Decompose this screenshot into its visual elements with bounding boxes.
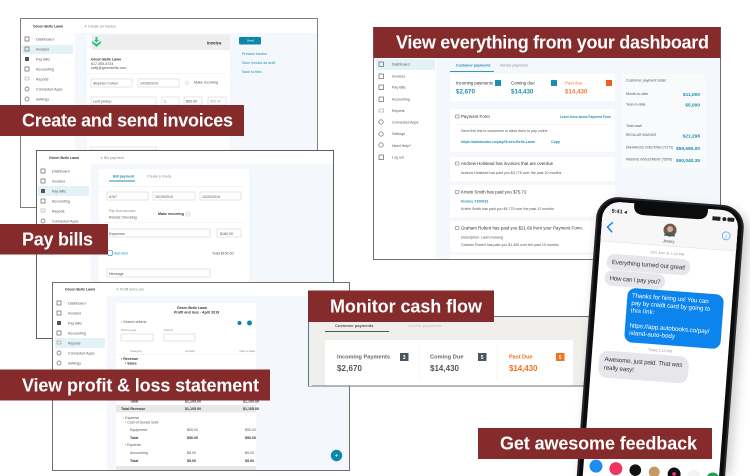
panel: dashboard screenshot: $90,040.35 bbox=[676, 158, 700, 164]
panel: monitor cash flow screenshot: Customer payments bbox=[335, 323, 374, 328]
panel: invoice screenshot: 10/26/2019 bbox=[140, 82, 158, 86]
panel: dashboard screenshot: Send this link to customers to allow them to pay online bbox=[461, 129, 548, 133]
banner: view profit and loss statement: View profit & loss statement bbox=[22, 376, 259, 396]
panel: profit and loss screenshot: $50.00 bbox=[245, 428, 256, 432]
panel: pay bills screenshot: Pay Bills bbox=[52, 190, 66, 194]
panel: pay bills screenshot: 10/19/2019 bbox=[155, 195, 173, 199]
panel: profit and loss screenshot: Accounting bbox=[68, 332, 86, 336]
panel: dashboard screenshot: Reports bbox=[392, 109, 405, 113]
panel: invoice screenshot: Make recurring bbox=[194, 80, 218, 84]
panel: dashboard screenshot: Customer payments bbox=[456, 64, 491, 68]
message bubble: payment link: Thanks for hiring us! You can bbox=[632, 292, 709, 305]
panel: invoice screenshot: Save invoice as draft bbox=[242, 61, 275, 65]
panel: dashboard screenshot: Invoices bbox=[392, 74, 405, 78]
panel: invoice screenshot bbox=[20, 18, 318, 208]
message bubble: payment link: https://app.autobooks.co/pay/ bbox=[629, 322, 710, 335]
message bubble: awesome just paid bbox=[598, 350, 689, 384]
panel: invoice screenshot: Settings bbox=[36, 98, 49, 102]
panel: invoice screenshot: 1 bbox=[164, 100, 166, 104]
panel: invoice screenshot: Leaf pickup bbox=[93, 100, 111, 104]
banner: pay bills: Pay bills bbox=[22, 230, 93, 250]
panel: dashboard screenshot: Copy bbox=[551, 140, 560, 144]
panel: profit and loss screenshot: Category bbox=[130, 349, 143, 353]
panel: profit and loss screenshot: $1,105.00 bbox=[243, 407, 259, 411]
panel: dashboard screenshot: Invoice #100031 bbox=[461, 200, 488, 204]
panel: dashboard screenshot: Past due bbox=[565, 80, 583, 86]
panel: profit and loss screenshot: $5.00 bbox=[245, 459, 254, 463]
icon: info: i bbox=[725, 234, 727, 240]
panel: pay bills screenshot: ✕ Bill payment bbox=[100, 156, 124, 160]
panel: profit and loss screenshot: Total bbox=[130, 400, 138, 404]
panel: pay bills screenshot: Pay from account bbox=[109, 209, 135, 213]
panel: invoice screenshot: ✕ Create an invoice bbox=[84, 24, 116, 28]
panel: profit and loss screenshot: $50.00 bbox=[245, 436, 256, 440]
icon: info bbox=[722, 232, 730, 241]
panel: profit and loss screenshot: Period bbox=[164, 328, 173, 332]
panel: profit and loss screenshot: › Expense bbox=[123, 416, 139, 420]
panel: invoice screenshot: Pay Bills bbox=[36, 58, 50, 62]
panel: dashboard screenshot: Need Help? bbox=[392, 144, 411, 148]
panel: monitor cash flow screenshot: Past Due bbox=[509, 354, 532, 360]
panel: dashboard screenshot: Graham Robert has paid you $1,455 over the past 10 months bbox=[461, 243, 559, 247]
panel: pay bills screenshot: Bill payment bbox=[113, 174, 135, 178]
message bubble: payment link: this link: bbox=[630, 307, 655, 316]
panel: dashboard screenshot: Kristin Smith has paid you $4,775 over the past 12 months bbox=[461, 207, 554, 211]
icon: phone notch bbox=[633, 202, 708, 220]
message bubble: awesome just paid: really easy! bbox=[604, 365, 634, 374]
panel: dashboard screenshot: $14,430 bbox=[565, 88, 588, 96]
panel: profit and loss screenshot: Green Belle Lawn bbox=[177, 306, 207, 310]
panel: profit and loss screenshot: $1,105.00 bbox=[243, 400, 259, 404]
panel: profit and loss screenshot: $5.00 bbox=[187, 459, 196, 463]
panel: dashboard screenshot bbox=[374, 28, 720, 260]
panel: pay bills screenshot: 10/20/2019 bbox=[202, 195, 220, 199]
panel: profit and loss screenshot: Current bbox=[185, 349, 195, 353]
panel: dashboard screenshot: Graham Robert has paid you $21.66 from your Payment Form. bbox=[461, 226, 583, 230]
panel: invoice screenshot: Connected Apps bbox=[36, 88, 63, 92]
panel: profit and loss screenshot: › Sales bbox=[125, 362, 137, 366]
panel: dashboard screenshot: Customer payment totals bbox=[626, 78, 666, 82]
panel: invoice screenshot: 617-555-5724 bbox=[91, 62, 113, 66]
panel: dashboard screenshot: Andrew Holstead has invoices that are overdue bbox=[461, 161, 554, 166]
message bubble: payment link: pay by credit card by going to bbox=[631, 300, 711, 313]
panel: pay bills screenshot: Connected Apps bbox=[52, 220, 79, 224]
panel: dashboard screenshot: $5,000 bbox=[685, 102, 700, 108]
phone body bbox=[577, 197, 744, 476]
banner: monitor cash flow bbox=[308, 290, 494, 322]
panel: profit and loss screenshot: Settings bbox=[68, 362, 81, 366]
banner: create and send invoices: Create and send invoices bbox=[22, 110, 233, 130]
panel: dashboard screenshot: ENHANCED CHECKING (*1273) bbox=[626, 146, 673, 150]
panel: profit and loss screenshot: Green Belle Lawn bbox=[65, 288, 95, 292]
timestamp: Today 1:18 PM bbox=[648, 348, 672, 354]
panel: profit and loss screenshot: › Expense bbox=[125, 443, 141, 447]
panel: invoice screenshot: Accounting bbox=[36, 68, 54, 72]
panel: pay bills screenshot: Green Belle Lawn bbox=[49, 156, 79, 160]
phone: text message conversation bbox=[577, 197, 748, 476]
panel: profit and loss screenshot: › Cost of Goods Sold bbox=[125, 420, 158, 424]
panel: pay bills screenshot: Invoices bbox=[52, 180, 65, 184]
panel: profit and loss screenshot: Total bbox=[130, 436, 138, 440]
panel: monitor cash flow screenshot: 3 bbox=[403, 355, 406, 361]
banner: create and send invoices bbox=[0, 105, 244, 136]
message bubble: payment link bbox=[624, 288, 724, 349]
banner: get awesome feedback bbox=[478, 428, 712, 459]
panel: monitor cash flow screenshot bbox=[308, 316, 598, 386]
status bar icons bbox=[712, 216, 735, 222]
panel: pay bills screenshot: Expenses bbox=[109, 232, 125, 236]
panel: profit and loss screenshot: ✕ Profit and Loss bbox=[116, 288, 144, 292]
panel: dashboard screenshot: Accounting bbox=[392, 98, 410, 102]
panel: invoice screenshot: Dashboard bbox=[36, 38, 54, 42]
panel: monitor cash flow screenshot: $2,670 bbox=[337, 364, 363, 373]
panel: invoice screenshot: Preview invoice bbox=[242, 52, 267, 56]
panel: pay bills screenshot: Rebate Checking bbox=[109, 216, 137, 220]
panel: pay bills screenshot: Accounting bbox=[52, 200, 70, 204]
contact name: Jersey bbox=[663, 238, 675, 244]
timestamp: Sun, Mar 31 1:20 PM bbox=[650, 250, 684, 257]
banner: get awesome feedback: Get awesome feedback bbox=[500, 434, 698, 454]
panel: profit and loss screenshot: ‹ Search criteria bbox=[121, 320, 146, 324]
panel: monitor cash flow screenshot: $14,430 bbox=[509, 364, 538, 373]
panel: profit and loss screenshot: Dashboard bbox=[68, 302, 86, 306]
panel: monitor cash flow screenshot: Vendor payments bbox=[408, 323, 442, 328]
contact avatar bbox=[663, 223, 677, 237]
banner: monitor cash flow: Monitor cash flow bbox=[330, 296, 483, 316]
panel: dashboard screenshot: Payment Form bbox=[461, 114, 490, 119]
panel: dashboard screenshot: Pay Bills bbox=[392, 86, 406, 90]
panel: profit and loss screenshot: Accounting bbox=[130, 451, 148, 455]
panel: profit and loss screenshot: Year to date bbox=[239, 349, 255, 353]
panel: profit and loss screenshot: $5.00 bbox=[245, 451, 254, 455]
panel: profit and loss screenshot: $50.00 bbox=[187, 428, 198, 432]
panel: dashboard screenshot: Vendor payments bbox=[500, 64, 528, 68]
panel: dashboard screenshot: Coming due bbox=[511, 80, 535, 86]
panel: dashboard screenshot: Andrew Holstead has paid you $4,778 over the past 10 months bbox=[461, 171, 561, 175]
panel: profit and loss screenshot: Pay Bills bbox=[68, 322, 82, 326]
message bubble: how can I pay you: How can I pay you? bbox=[609, 275, 661, 286]
panel: dashboard screenshot: Year-to-date bbox=[626, 102, 646, 106]
panel: profit and loss screenshot: Profit and loss · April 2019 bbox=[174, 310, 219, 314]
panel: dashboard screenshot: Connected Apps bbox=[392, 120, 419, 124]
panel: profit and loss screenshot: $50.00 bbox=[187, 436, 198, 440]
panel: dashboard screenshot: PASSIVE INVESTMENT (*5678) bbox=[626, 158, 672, 162]
panel: profit and loss screenshot: Invoices bbox=[68, 312, 81, 316]
banner: view profit and loss statement bbox=[0, 370, 270, 400]
panel: profit and loss screenshot: Total bbox=[130, 459, 138, 463]
panel: profit and loss screenshot: Period year bbox=[121, 328, 136, 332]
panel: dashboard screenshot: Kristin Smith has paid you $75.72 bbox=[461, 190, 527, 194]
panel: monitor cash flow screenshot: 5 bbox=[481, 355, 484, 361]
panel: pay bills screenshot: #767 bbox=[109, 195, 117, 199]
panel: dashboard screenshot: https://autobooks.co/pay/Green-Belle-Lawn bbox=[461, 140, 535, 144]
status bar time: 9:41 ◂ bbox=[611, 209, 628, 216]
panel: monitor cash flow screenshot: $14,430 bbox=[430, 364, 460, 373]
phone screen bbox=[583, 202, 738, 476]
banner: view everything from your dashboard bbox=[374, 27, 720, 58]
panel: profit and loss screenshot: Reports bbox=[68, 342, 81, 346]
panel: profit and loss screenshot: Connected Apps bbox=[68, 352, 95, 356]
panel: dashboard screenshot: Month-to-date bbox=[626, 92, 648, 96]
icon: add button: + bbox=[335, 454, 339, 460]
message bubble: everything turned out great bbox=[606, 253, 691, 276]
panel: invoice screenshot: Invoice bbox=[207, 40, 222, 46]
panel: pay bills screenshot bbox=[36, 150, 334, 338]
panel: dashboard screenshot: $2,670 bbox=[456, 88, 475, 96]
message bubble: how can I pay you bbox=[604, 270, 666, 290]
panel: pay bills screenshot: Make recurring bbox=[158, 212, 184, 216]
panel: pay bills screenshot: Dashboard bbox=[52, 170, 70, 174]
banner: view everything from your dashboard: View everything from your dashboard bbox=[396, 32, 709, 52]
panel: pay bills screenshot: Message bbox=[109, 272, 124, 276]
panel: profit and loss screenshot: Total Revenue bbox=[121, 407, 145, 411]
message bubble: awesome just paid: Awesome, just paid. That was bbox=[604, 356, 683, 369]
panel: dashboard screenshot: $11,000 bbox=[683, 92, 700, 98]
banner: pay bills bbox=[0, 224, 108, 254]
panel: invoice screenshot: sally@greenbelle.com bbox=[91, 66, 126, 70]
message bubble: payment link: island-auto-body bbox=[629, 330, 676, 340]
panel: dashboard screenshot: Total cash bbox=[626, 124, 642, 128]
panel: monitor cash flow screenshot: Coming Due bbox=[430, 354, 464, 360]
panel: invoice screenshot: Invoices bbox=[36, 48, 49, 52]
panel: profit and loss screenshot: Equipment bbox=[130, 428, 147, 432]
panel: pay bills screenshot: Reports bbox=[52, 210, 65, 214]
panel: dashboard screenshot: $21,298 bbox=[683, 134, 700, 140]
panel: invoice screenshot: Stephen Cohen bbox=[93, 82, 118, 86]
panel: monitor cash flow screenshot: Incoming Payments bbox=[337, 354, 390, 360]
panel: dashboard screenshot: Dashboard bbox=[392, 62, 410, 66]
panel: profit and loss screenshot: $5.00 bbox=[187, 451, 196, 455]
icon: back chevron bbox=[607, 222, 613, 232]
panel: invoice screenshot: $50.00 bbox=[210, 100, 221, 104]
panel: invoice screenshot: Green Belle Lawn bbox=[33, 24, 63, 28]
panel: dashboard screenshot: $14,430 bbox=[511, 88, 534, 96]
message thread bbox=[590, 200, 739, 387]
panel: invoice screenshot: Green Belle Lawn bbox=[91, 58, 121, 62]
panel: invoice screenshot: $50.00 bbox=[186, 100, 197, 104]
panel: dashboard screenshot: Description: Lawn mowing bbox=[461, 236, 503, 240]
panel: pay bills screenshot: Add item bbox=[114, 252, 128, 256]
panel: dashboard screenshot: Settings bbox=[392, 132, 405, 136]
panel: profit and loss screenshot: › Revenue bbox=[121, 357, 138, 361]
panel: profit and loss screenshot: $1,105.00 bbox=[185, 407, 201, 411]
message bubble: everything turned out great: Everything turned out great! bbox=[612, 259, 686, 272]
panel: dashboard screenshot: Incoming payments bbox=[456, 80, 494, 86]
panel: monitor cash flow screenshot: 5 bbox=[559, 355, 562, 361]
panel: pay bills screenshot: Create a check bbox=[147, 174, 171, 178]
panel: dashboard screenshot: $59,695.00 bbox=[676, 146, 700, 152]
panel: pay bills screenshot: Total $150.00 bbox=[212, 252, 234, 256]
panel: profit and loss screenshot bbox=[52, 282, 350, 470]
panel: invoice screenshot: Save to files bbox=[242, 70, 262, 74]
panel: dashboard screenshot: Learn more about Payment Form bbox=[560, 115, 611, 119]
icon: add button bbox=[331, 450, 342, 461]
app icon row bbox=[589, 460, 719, 476]
panel: invoice screenshot: Send bbox=[247, 38, 254, 42]
panel: pay bills screenshot: $180.00 bbox=[220, 232, 233, 236]
panel: profit and loss screenshot: $1,105.00 bbox=[185, 400, 201, 404]
panel: dashboard screenshot: Log out bbox=[392, 156, 404, 160]
panel: dashboard screenshot: REGULAR SAVINGS bbox=[626, 133, 656, 137]
panel: invoice screenshot: Reports bbox=[36, 78, 49, 82]
